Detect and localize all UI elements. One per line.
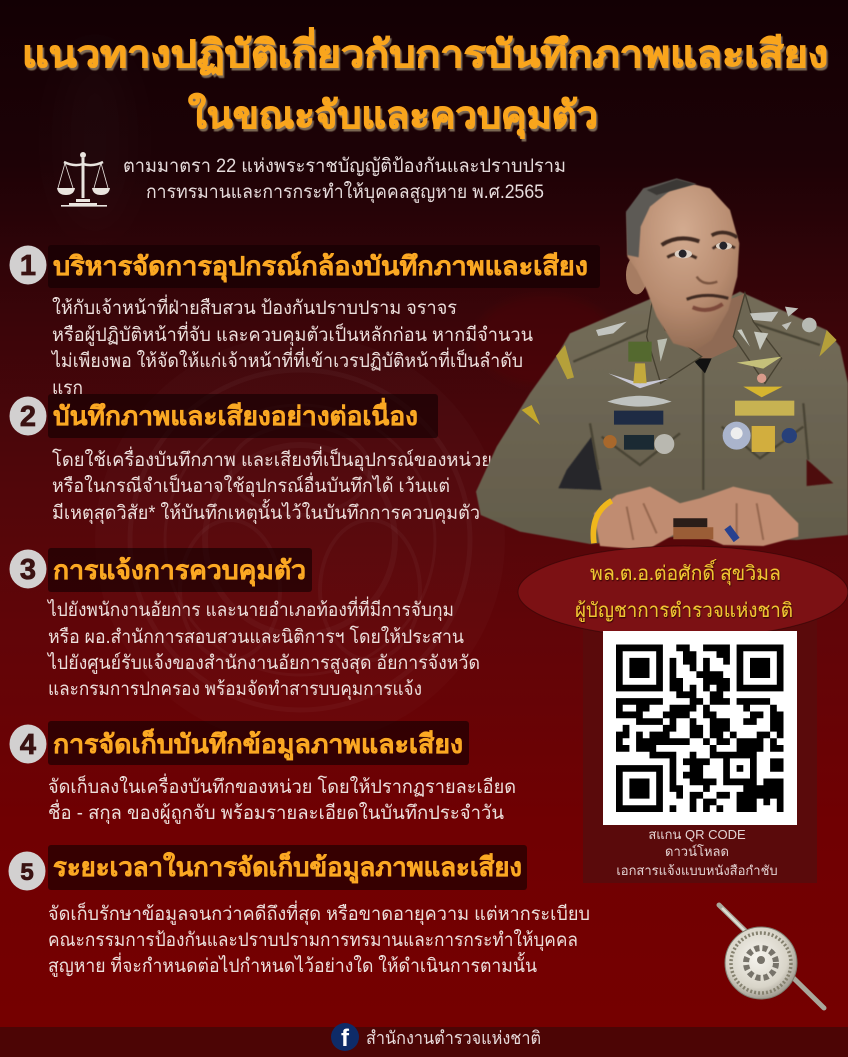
body 1 xyxy=(50,294,533,399)
number 2 xyxy=(10,396,46,436)
head xyxy=(627,180,739,350)
QR caption: ดาวน์โหลด xyxy=(665,844,729,859)
footer label: สำนักงานตำรวจแห่งชาติ xyxy=(366,1028,541,1048)
heading 2: บันทึกภาพและเสียงอย่างต่อเนื่อง xyxy=(53,397,418,431)
ear xyxy=(626,256,647,294)
watermark emblem xyxy=(95,295,615,745)
number 3 xyxy=(10,550,46,588)
heading 3: การแจ้งการควบคุมตัว xyxy=(53,555,306,587)
body silhouette xyxy=(476,292,848,544)
portrait: officer xyxy=(476,178,848,550)
heading bar 5 xyxy=(48,845,527,890)
footer band xyxy=(0,1023,848,1057)
section 5 xyxy=(8,845,590,977)
section 2 xyxy=(10,394,492,525)
hair xyxy=(626,178,697,257)
number 1 xyxy=(10,246,46,284)
body 2: หรือในกรณีจำเป็นอาจใช้อุปกรณ์อื่นบันทึกได้ เว้นแต่ xyxy=(52,472,450,498)
hands xyxy=(594,487,798,550)
section 1 xyxy=(10,245,600,399)
light streak xyxy=(61,50,129,230)
dark gap left xyxy=(558,437,602,490)
uniform folds xyxy=(573,320,820,490)
body 1: หรือผู้ปฏิบัติหน้าที่จับ และควบคุมตัวเป็นหลักก่อน หากมีจำนวน xyxy=(52,321,533,347)
number 5: 5 xyxy=(20,859,34,886)
QR backing panel xyxy=(583,610,817,883)
heading bar 1 xyxy=(48,245,600,288)
body 3: ไปยังพนักงานอัยการ และนายอำเภอท้องที่ที่มีการจับกุม xyxy=(46,596,454,622)
section 4 xyxy=(10,721,516,825)
heading bar 2 xyxy=(48,394,438,438)
subtitle: การทรมานและการกระทำให้บุคคลสูญหาย พ.ศ.2565 xyxy=(146,181,544,204)
body 4: ชื่อ - สกุล ของผู้ถูกจับ พร้อมรายละเอียดในบันทึกประจำวัน xyxy=(48,799,504,825)
wristband xyxy=(593,501,612,543)
body 2: มีเหตุสุดวิสัย* ให้บันทึกเหตุนั้นไว้ในบันทึกการควบคุมตัว xyxy=(52,499,480,525)
name ellipse: พล.ต.อ.ต่อศักดิ์ สุขวิมล xyxy=(590,558,781,586)
body 5: คณะกรรมการป้องกันและปราบปรามการทรมานและการกระทำให้บุคคล xyxy=(48,929,578,952)
name ellipse: ผู้บัญชาการตำรวจแห่งชาติ xyxy=(575,600,793,623)
red gap right xyxy=(807,459,833,486)
heading bar 4 xyxy=(48,721,469,765)
body 2: โดยใช้เครื่องบันทึกภาพ และเสียงที่เป็นอุปกรณ์ของหน่วย xyxy=(52,446,492,472)
icon: krabi krabong emblem xyxy=(719,905,824,1008)
number 4: 4 xyxy=(20,729,36,761)
icon: facebook xyxy=(331,1023,359,1052)
title xyxy=(22,27,828,139)
body 3: หรือ ผอ.สำนักการสอบสวนและนิติการฯ โดยให้ประสาน xyxy=(48,625,464,648)
face features xyxy=(662,232,737,310)
body 2 xyxy=(52,446,492,525)
number 1: 1 xyxy=(20,250,36,282)
section 3 xyxy=(10,548,480,701)
neck xyxy=(650,293,745,363)
body 3: และกรมการปกครอง พร้อมจัดทำสารบบคุมการแจ้ง xyxy=(48,679,422,701)
icon: facebook: f xyxy=(341,1025,350,1052)
body 5: สูญหาย ที่จะกำหนดต่อไปกำหนดไว้อย่างใด ให้ดำเนินการตามนั้น xyxy=(48,952,537,977)
body 1: แรก xyxy=(52,378,83,399)
body 1: ให้กับเจ้าหน้าที่ฝ่ายสืบสวน ป้องกันปราบปราม จราจร xyxy=(52,294,457,319)
name ellipse xyxy=(518,546,848,638)
heading bar 3 xyxy=(48,548,312,592)
body 4: จัดเก็บลงในเครื่องบันทึกของหน่วย โดยให้ปรากฏรายละเอียด xyxy=(48,773,516,798)
heading 4: การจัดเก็บบันทึกข้อมูลภาพและเสียง xyxy=(53,728,463,761)
subtitle xyxy=(123,156,566,204)
QR caption: เอกสารแจ้งแบบหนังสือกำชับ xyxy=(616,863,778,878)
QR code xyxy=(603,631,797,825)
title line 2: ในขณะจับและควบคุมตัว xyxy=(188,93,598,139)
shoulder boards and insignia xyxy=(522,307,837,454)
ring xyxy=(727,527,737,540)
body 1: ไม่เพียงพอ ให้จัดให้แก่เจ้าหน้าที่ที่เข้าเวรปฏิบัติหน้าที่เป็นลำดับ xyxy=(50,347,523,372)
title line 1: แนวทางปฏิบัติเกี่ยวกับการบันทึกภาพและเสียง xyxy=(22,27,828,76)
number 2: 2 xyxy=(20,401,36,433)
icon: scales of justice xyxy=(57,152,110,207)
subtitle: ตามมาตรา 22 แห่งพระราชบัญญัติป้องกันและปราบปราม xyxy=(123,156,566,177)
collars xyxy=(647,293,782,383)
QR caption: สแกน QR CODE xyxy=(648,827,746,842)
number 3: 3 xyxy=(20,554,36,586)
body 3: ไปยังศูนย์รับแจ้งของสำนักงานอัยการสูงสุด อัยการจังหวัด xyxy=(46,652,480,675)
QR caption xyxy=(616,827,778,878)
heading 5: ระยะเวลาในการจัดเก็บข้อมูลภาพและเสียง xyxy=(53,851,522,884)
heading 1: บริหารจัดการอุปกรณ์กล้องบันทึกภาพและเสียง xyxy=(53,251,588,283)
body 5: จัดเก็บรักษาข้อมูลจนกว่าคดีถึงที่สุด หรือขาดอายุความ แต่หากระเบียบ xyxy=(48,900,590,926)
number 5 xyxy=(8,852,46,890)
number 4 xyxy=(10,724,46,764)
body 4 xyxy=(48,773,516,825)
body 3 xyxy=(46,596,480,701)
body 5 xyxy=(48,900,590,977)
